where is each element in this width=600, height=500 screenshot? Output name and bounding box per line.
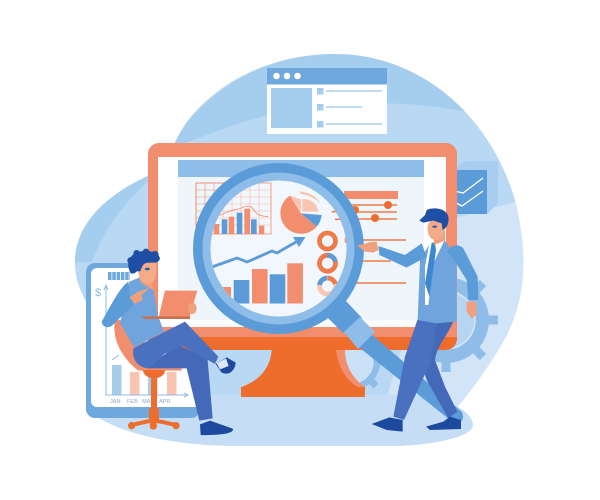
back leg <box>420 310 457 418</box>
handle <box>350 327 463 424</box>
donut charts <box>320 233 336 249</box>
lower shoe <box>200 421 233 435</box>
large bars <box>199 287 219 304</box>
upper leg <box>133 322 218 368</box>
arm <box>102 282 133 327</box>
face <box>427 219 445 240</box>
chair <box>114 320 182 430</box>
tablet with chart <box>86 263 200 418</box>
hand on laptop <box>188 303 197 314</box>
laptop <box>158 291 197 318</box>
monitor stand <box>241 345 365 397</box>
eye <box>145 268 150 270</box>
pointing hand <box>357 242 378 253</box>
sliders in lens <box>332 210 340 220</box>
tablet header stripes <box>108 272 130 280</box>
neck <box>138 277 153 290</box>
gear large <box>394 268 498 372</box>
neck <box>433 230 445 245</box>
hand <box>129 288 150 304</box>
infographic illustration <box>75 54 524 446</box>
background blob <box>60 40 540 446</box>
tablet labels <box>110 399 171 405</box>
eye <box>432 225 437 228</box>
lens contents <box>212 182 346 304</box>
tablet labels: JAN <box>110 399 121 405</box>
floating chart card <box>449 161 498 214</box>
handle neck <box>325 300 362 333</box>
dollar sign: $ <box>95 287 101 299</box>
handle collar <box>344 317 375 349</box>
tablet axes <box>104 285 188 397</box>
lens ring <box>193 163 364 334</box>
standing man <box>357 208 478 432</box>
crossed leg back <box>147 345 213 421</box>
tablet labels: FEB <box>127 399 138 405</box>
face <box>138 261 156 284</box>
browser window card <box>267 68 387 134</box>
seated man <box>102 249 236 435</box>
right arm <box>447 245 478 300</box>
shirt <box>425 239 445 305</box>
tie <box>425 243 436 297</box>
gear small <box>318 328 386 396</box>
small bars <box>213 191 357 243</box>
lens grid <box>212 182 272 234</box>
magnifying glass <box>193 163 463 424</box>
lens glass <box>210 180 346 316</box>
tablet labels: APR <box>159 399 171 405</box>
right hand <box>467 302 477 318</box>
floor <box>87 395 473 446</box>
pie chart <box>280 196 317 234</box>
torso <box>120 277 164 347</box>
upper foot <box>216 357 236 374</box>
pointing arm <box>378 243 427 268</box>
front leg <box>393 307 437 420</box>
tablet bars <box>112 365 122 395</box>
monitor <box>148 143 457 350</box>
screen line chart grid <box>196 183 271 234</box>
tablet labels: MAR <box>142 399 154 405</box>
back shoe <box>426 417 461 430</box>
front shoe <box>372 417 403 432</box>
hair <box>127 249 160 274</box>
screen sliders and lines <box>344 191 406 283</box>
hair <box>419 208 449 230</box>
trend arrow <box>212 242 296 267</box>
jacket <box>418 241 457 323</box>
